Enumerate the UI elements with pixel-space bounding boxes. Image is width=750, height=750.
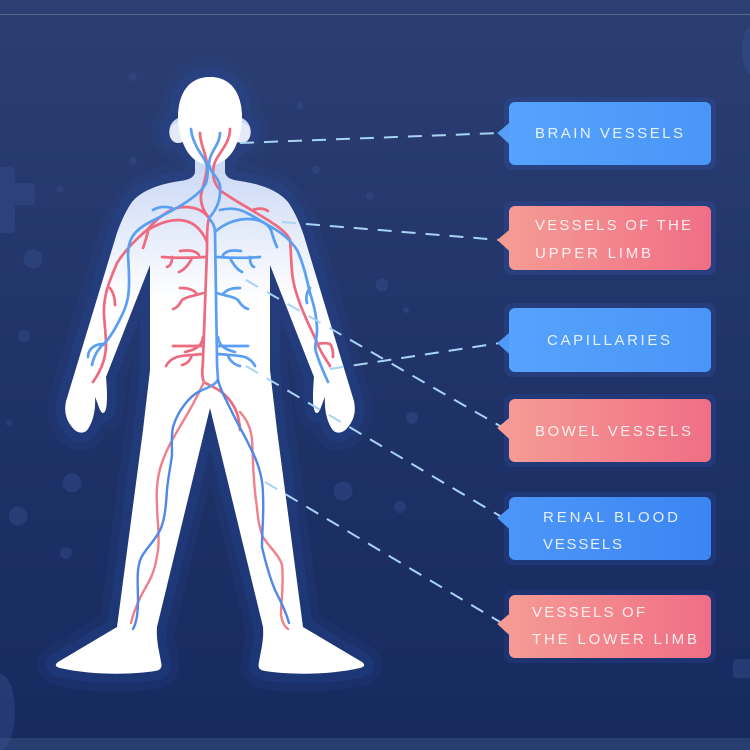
label: vessels of the lower limb: THE LOWER LIMB [532, 631, 697, 648]
red arteries [93, 129, 333, 430]
blue leg veins [133, 380, 289, 629]
label: brain vessels [498, 97, 716, 170]
label: bowel vessels [498, 394, 716, 467]
label: capillaries [498, 303, 716, 377]
human figure [56, 77, 364, 674]
bottom band [0, 738, 750, 750]
red leg arteries [131, 382, 288, 629]
label: renal blood vessels: RENAL BLOOD [543, 509, 678, 526]
label: capillaries: CAPILLARIES [547, 332, 670, 349]
label: renal blood vessels: VESSELS [543, 536, 622, 553]
body silhouette [56, 77, 364, 674]
blue veins [88, 129, 328, 391]
dashed connector lines [240, 133, 500, 622]
label: vessels of the lower limb: VESSELS OF [532, 604, 645, 621]
label: vessels of the lower limb [498, 590, 716, 663]
label: vessels of the upper limb: UPPER LIMB [535, 245, 651, 262]
ears [170, 123, 250, 143]
label: renal blood vessels [498, 492, 716, 565]
head [178, 77, 242, 165]
figure inner glow [56, 77, 364, 674]
figure outer glow [56, 77, 364, 674]
label: brain vessels: BRAIN VESSELS [535, 125, 683, 142]
label: vessels of the upper limb [498, 201, 716, 275]
label: bowel vessels: BOWEL VESSELS [535, 423, 691, 440]
label: vessels of the upper limb: VESSELS OF THE [535, 217, 691, 234]
top border line [0, 14, 750, 15]
